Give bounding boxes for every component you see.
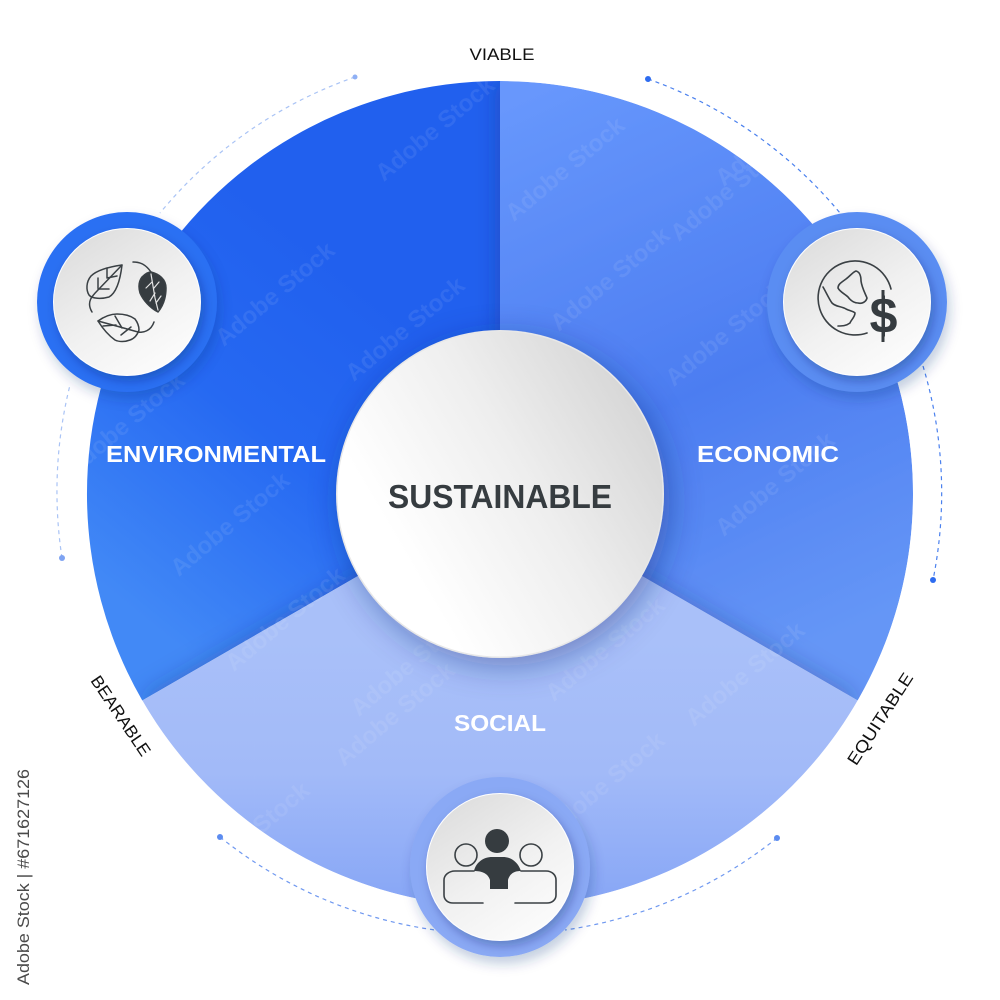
watermark: faint repeated stock marks: Adobe Stock: [370, 71, 501, 187]
watermark: faint repeated stock marks: Adobe Stock: [340, 271, 471, 387]
watermark: faint repeated stock marks: Adobe Stock: [345, 606, 476, 722]
label: bearable: BEARABLE: [87, 672, 154, 760]
label: environmental: ENVIRONMENTAL: [106, 441, 326, 467]
heading: sustainable: SUSTAINABLE: [388, 478, 612, 515]
label: equitable: EQUITABLE: [844, 669, 917, 769]
watermark: faint repeated stock marks: Adobe Stock: [710, 76, 841, 192]
watermark: faint repeated stock marks: Adobe Stock: [500, 111, 631, 227]
watermark: faint repeated stock marks: Adobe Stock: [665, 131, 796, 247]
label: viable: VIABLE: [470, 45, 534, 64]
watermark: faint repeated stock marks: Adobe Stock: [540, 591, 671, 707]
watermark: stock id: Adobe Stock | #671627126: [14, 769, 33, 985]
dashed arcs around the circle: [57, 74, 942, 930]
watermark: faint repeated stock marks: Adobe Stock: [185, 776, 316, 892]
watermark: faint repeated stock marks: Adobe Stock: [660, 276, 791, 392]
icon badge: social people: [410, 777, 590, 957]
icon: three leaves: [87, 262, 166, 342]
icon badge: economic globe and dollar: [767, 212, 947, 392]
watermark: faint repeated stock marks: Adobe Stock: [710, 426, 841, 542]
center disc: sustainable: [336, 330, 664, 658]
panel: social segment: [142, 568, 859, 898]
watermark: faint repeated stock marks: Adobe Stock: [680, 616, 811, 732]
watermark: faint repeated stock marks: Adobe Stock: [60, 366, 191, 482]
watermark: faint repeated stock marks: Adobe Stock: [330, 656, 461, 772]
watermark: faint repeated stock marks: Adobe Stock: [165, 466, 296, 582]
panel: environmental segment: [87, 81, 500, 700]
icon badge: environmental leaves: [37, 212, 217, 392]
watermark: faint repeated stock marks: Adobe Stock: [540, 726, 671, 842]
label: economic: ECONOMIC: [697, 441, 839, 467]
panel: economic segment: [500, 81, 913, 700]
watermark: faint repeated stock marks: Adobe Stock: [545, 221, 676, 337]
watermark: faint repeated stock marks: Adobe Stock: [220, 561, 351, 677]
watermark: faint repeated stock marks: Adobe Stock: [210, 236, 341, 352]
icon: globe: [818, 261, 891, 335]
icon: three people: [444, 829, 556, 903]
label: social: SOCIAL: [454, 710, 546, 736]
icon: dollar sign: $: [870, 288, 898, 344]
watermark: faint repeated stock marks: [60, 71, 841, 892]
